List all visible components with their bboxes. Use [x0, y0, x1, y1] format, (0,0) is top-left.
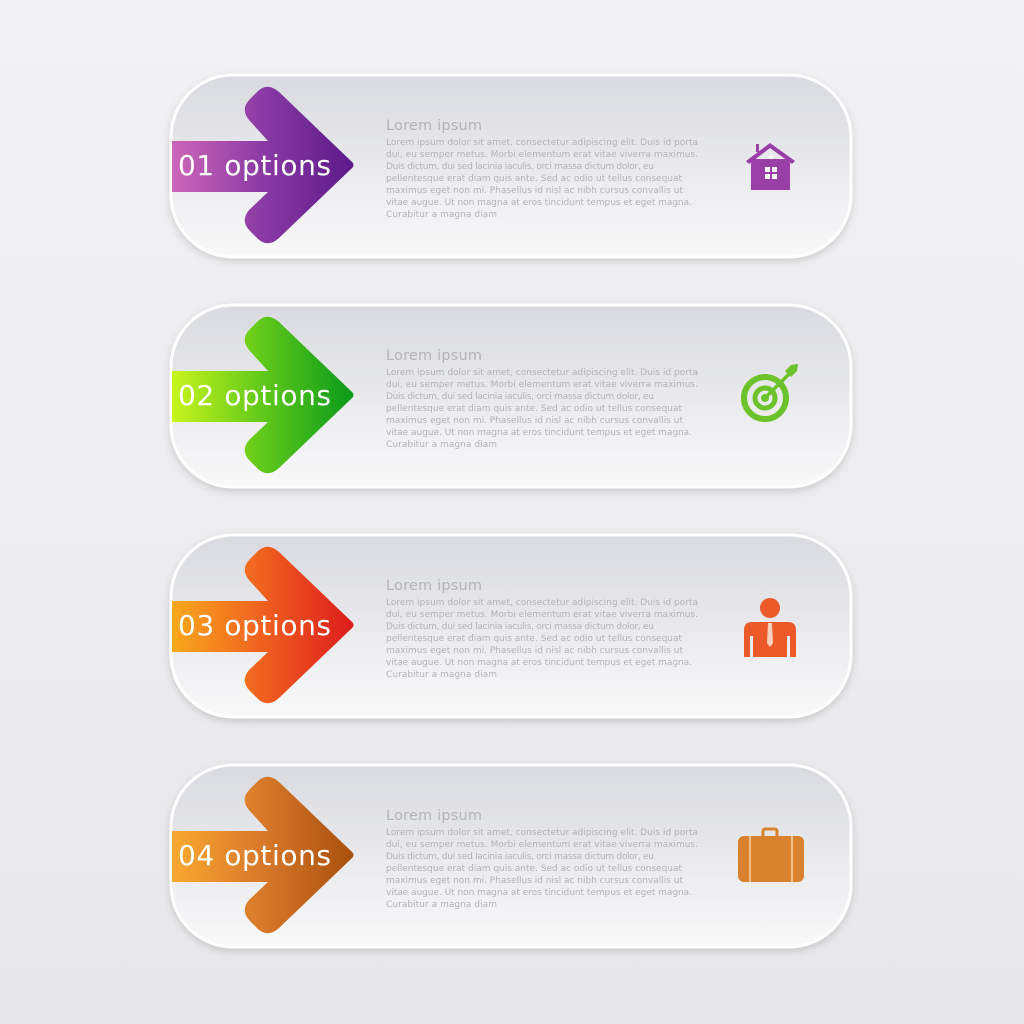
- text block: 01: Curabitur a magna diam: [386, 210, 497, 220]
- text block: 03: Lorem ipsum: [386, 578, 482, 594]
- arrow: 02 options: 02 options: [178, 379, 331, 412]
- text block: 02: [386, 348, 698, 450]
- text block: 03: Curabitur a magna diam: [386, 670, 497, 680]
- text block: 01: vitae augue. Ut non magna at eros tincidunt tempus et eget magna.: [386, 198, 692, 208]
- text block: 04: [386, 808, 698, 910]
- text block: 04: Duis dictum, dui sed lacinia iaculis, orci massa dictum dolor, eu: [386, 852, 654, 862]
- text block: 04: vitae augue. Ut non magna at eros tincidunt tempus et eget magna.: [386, 888, 692, 898]
- text block: 01: dui, eu semper metus. Morbi elementum erat vitae viverra maximus.: [386, 150, 698, 160]
- text block: 01: [386, 118, 698, 220]
- text block: 01: pellentesque erat diam quis ante. Sed ac odio ut tellus consequat: [386, 174, 682, 184]
- panel: option 01: [171, 75, 851, 257]
- text block: 04: pellentesque erat diam quis ante. Sed ac odio ut tellus consequat: [386, 864, 682, 874]
- text block: 01: Lorem ipsum dolor sit amet, consectetur adipiscing elit. Duis id porta: [386, 138, 698, 148]
- arrow: 03 options: 03 options: [178, 609, 331, 642]
- text block: 01: maximus eget non mi. Phasellus id nisl ac nibh cursus convallis ut: [386, 186, 683, 196]
- text block: 03: Lorem ipsum dolor sit amet, consectetur adipiscing elit. Duis id porta: [386, 598, 698, 608]
- panel: option 02: [171, 305, 851, 487]
- icon: target: [744, 364, 798, 419]
- text block: 02: Lorem ipsum dolor sit amet, consectetur adipiscing elit. Duis id porta: [386, 368, 698, 378]
- text block: 02: vitae augue. Ut non magna at eros tincidunt tempus et eget magna.: [386, 428, 692, 438]
- icon: house: [746, 143, 795, 190]
- arrow: 01 options: 01 options: [178, 149, 331, 182]
- text block: 04: maximus eget non mi. Phasellus id nisl ac nibh cursus convallis ut: [386, 876, 683, 886]
- text block: 02: maximus eget non mi. Phasellus id nisl ac nibh cursus convallis ut: [386, 416, 683, 426]
- text block: 03: Duis dictum, dui sed lacinia iaculis, orci massa dictum dolor, eu: [386, 622, 654, 632]
- text block: 01: Lorem ipsum: [386, 118, 482, 134]
- text block: 03: dui, eu semper metus. Morbi elementum erat vitae viverra maximus.: [386, 610, 698, 620]
- text block: 02: Lorem ipsum: [386, 348, 482, 364]
- text block: 04: dui, eu semper metus. Morbi elementum erat vitae viverra maximus.: [386, 840, 698, 850]
- text block: 03: vitae augue. Ut non magna at eros tincidunt tempus et eget magna.: [386, 658, 692, 668]
- arrow: 01 options: [172, 87, 354, 243]
- text block: 04: Lorem ipsum dolor sit amet, consectetur adipiscing elit. Duis id porta: [386, 828, 698, 838]
- panel: option 04: [171, 765, 851, 947]
- text block: 02: Duis dictum, dui sed lacinia iaculis, orci massa dictum dolor, eu: [386, 392, 654, 402]
- text block: 02: dui, eu semper metus. Morbi elementum erat vitae viverra maximus.: [386, 380, 698, 390]
- text block: 03: [386, 578, 698, 680]
- text block: 01: Duis dictum, dui sed lacinia iaculis, orci massa dictum dolor, eu: [386, 162, 654, 172]
- panel: option 03: [171, 535, 851, 717]
- text block: 03: pellentesque erat diam quis ante. Sed ac odio ut tellus consequat: [386, 634, 682, 644]
- text block: 03: maximus eget non mi. Phasellus id nisl ac nibh cursus convallis ut: [386, 646, 683, 656]
- icon: person: [744, 598, 796, 657]
- arrow: 04 options: 04 options: [178, 839, 331, 872]
- text block: 02: Curabitur a magna diam: [386, 440, 497, 450]
- icon: suitcase: [738, 829, 804, 882]
- text block: 02: pellentesque erat diam quis ante. Sed ac odio ut tellus consequat: [386, 404, 682, 414]
- text block: 04: Curabitur a magna diam: [386, 900, 497, 910]
- arrow: 03 options: [172, 547, 354, 703]
- arrow: 02 options: [172, 317, 354, 473]
- text block: 04: Lorem ipsum: [386, 808, 482, 824]
- arrow: 04 options: [172, 777, 354, 933]
